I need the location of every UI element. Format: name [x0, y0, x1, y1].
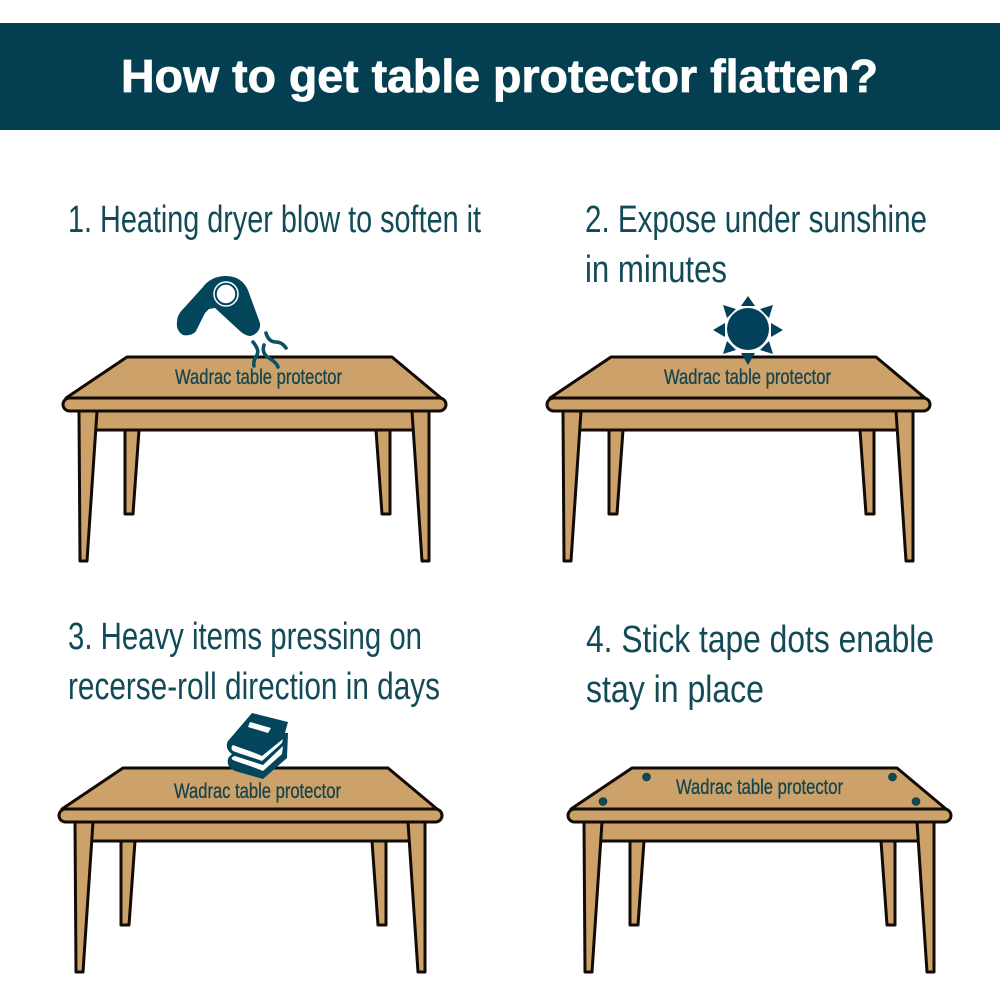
panel: step 4 tape dots [568, 619, 951, 972]
heading: step 3 second line: recerse-roll direction in days [68, 666, 440, 708]
heading: step 1: 1. Heating dryer blow to soften it [68, 199, 481, 241]
panel: step 3 heavy items [59, 616, 442, 972]
table 4 [568, 768, 951, 972]
title banner [0, 23, 1000, 130]
heading: step 3: 3. Heavy items pressing on [68, 616, 422, 658]
icon: books [227, 713, 288, 779]
heading: step 4 second line: stay in place [586, 669, 764, 711]
title banner: How to get table protector flatten? [121, 50, 878, 102]
heading: step 2 second line: in minutes [585, 249, 727, 291]
table label 4: Wadrac table protector [676, 776, 843, 799]
table label 1: Wadrac table protector [175, 366, 342, 389]
icon: hair dryer [177, 276, 286, 367]
table label 3: Wadrac table protector [174, 780, 341, 803]
table label 2: Wadrac table protector [664, 366, 831, 389]
heading: step 4: 4. Stick tape dots enable [586, 619, 934, 661]
table 1 [63, 357, 446, 561]
panel: step 2 sunshine [547, 199, 930, 561]
table 3 [59, 768, 442, 972]
tape dots [599, 773, 920, 806]
panel: step 1 heating dryer [63, 199, 481, 561]
icon: sun [713, 296, 783, 365]
table 2 [547, 357, 930, 561]
